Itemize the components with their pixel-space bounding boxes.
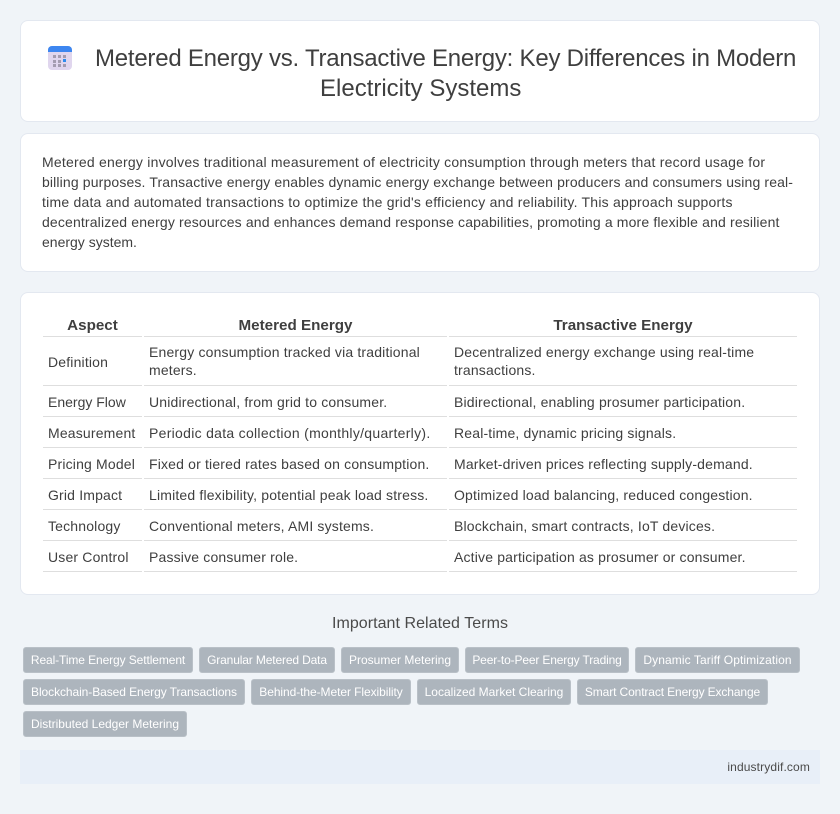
row: energy flow: Unidirectional, from grid to consumer. — [149, 394, 387, 410]
tag — [341, 647, 459, 673]
comparison table — [43, 317, 797, 572]
tag: Behind-the-Meter Flexibility — [259, 685, 403, 699]
tag — [251, 679, 411, 705]
footer source: industrydif.com — [727, 760, 810, 774]
row: energy flow: Bidirectional, enabling prosumer participation. — [454, 394, 745, 410]
tag: Localized Market Clearing — [425, 685, 563, 699]
panel: comparison table — [20, 292, 820, 595]
related terms heading: Important Related Terms — [332, 615, 508, 632]
tag — [417, 679, 571, 705]
intro text: Metered energy involves traditional measurement of electricity consumption through meters that record usage for — [42, 154, 765, 170]
tag: Real-Time Energy Settlement — [31, 653, 185, 667]
row: grid impact: Optimized load balancing, reduced congestion. — [454, 487, 753, 503]
row: technology — [48, 518, 715, 534]
table header — [67, 317, 693, 334]
row: user control: Active participation as prosumer or consumer. — [454, 549, 746, 565]
row: pricing model: Pricing Model — [48, 456, 135, 472]
row: measurement — [48, 425, 676, 441]
table header: Transactive Energy — [553, 317, 693, 334]
related terms tags — [23, 647, 800, 737]
tag — [199, 647, 335, 673]
row: technology: Blockchain, smart contracts, IoT devices. — [454, 518, 715, 534]
tag — [635, 647, 800, 673]
title: Electricity Systems — [320, 75, 521, 102]
row: user control: Passive consumer role. — [149, 549, 298, 565]
tag: Peer-to-Peer Energy Trading — [472, 653, 622, 667]
row: measurement: Measurement — [48, 425, 135, 441]
row: energy flow — [48, 394, 745, 410]
tag — [577, 679, 768, 705]
row: definition: Definition — [48, 354, 108, 370]
row: pricing model: Market-driven prices reflecting supply-demand. — [454, 456, 753, 472]
tag: Prosumer Metering — [349, 653, 451, 667]
row: grid impact — [48, 487, 753, 503]
intro text: energy system. — [42, 234, 137, 250]
row: definition: Decentralized energy exchange using real-time — [454, 344, 754, 360]
panel: intro — [20, 133, 820, 272]
row: definition: meters. — [149, 362, 197, 378]
tag: Distributed Ledger Metering — [31, 717, 179, 731]
row: grid impact: Limited flexibility, potential peak load stress. — [149, 487, 428, 503]
row: user control: User Control — [48, 549, 129, 565]
intro text — [42, 154, 793, 250]
tag: Smart Contract Energy Exchange — [585, 685, 760, 699]
tag: Blockchain-Based Energy Transactions — [31, 685, 237, 699]
title: Metered Energy vs. Transactive Energy: Key Differences in Modern — [95, 45, 796, 72]
row: pricing model: Fixed or tiered rates based on consumption. — [149, 456, 429, 472]
tag — [465, 647, 629, 673]
intro text: billing purposes. Transactive energy enables dynamic energy exchange between producers and consumers using real- — [42, 174, 793, 190]
row: user control — [48, 549, 746, 565]
row: pricing model — [48, 456, 753, 472]
icon: calendar — [48, 46, 72, 70]
row: energy flow: Energy Flow — [48, 394, 126, 410]
row: grid impact: Grid Impact — [48, 487, 122, 503]
tag — [23, 647, 193, 673]
table header: Aspect — [67, 317, 118, 334]
intro text: decentralized energy resources and enhances demand response capabilities, promoting a more flexible and resilient — [42, 214, 780, 230]
title — [95, 45, 796, 102]
tag: Granular Metered Data — [207, 653, 327, 667]
row: technology: Conventional meters, AMI systems. — [149, 518, 374, 534]
table header: Metered Energy — [239, 317, 352, 334]
row: definition: Energy consumption tracked via traditional — [149, 344, 420, 360]
intro text: time data and automated transactions to optimize the grid's efficiency and reliability. This approach supports — [42, 194, 733, 210]
row: measurement: Periodic data collection (monthly/quarterly). — [149, 425, 431, 441]
tag: Dynamic Tariff Optimization — [643, 653, 792, 667]
footer bar — [20, 750, 820, 784]
tag — [23, 711, 187, 737]
header panel — [20, 20, 820, 122]
row: definition: transactions. — [454, 362, 536, 378]
row: definition — [48, 344, 754, 378]
row: measurement: Real-time, dynamic pricing signals. — [454, 425, 676, 441]
tag — [23, 679, 245, 705]
row: technology: Technology — [48, 518, 121, 534]
